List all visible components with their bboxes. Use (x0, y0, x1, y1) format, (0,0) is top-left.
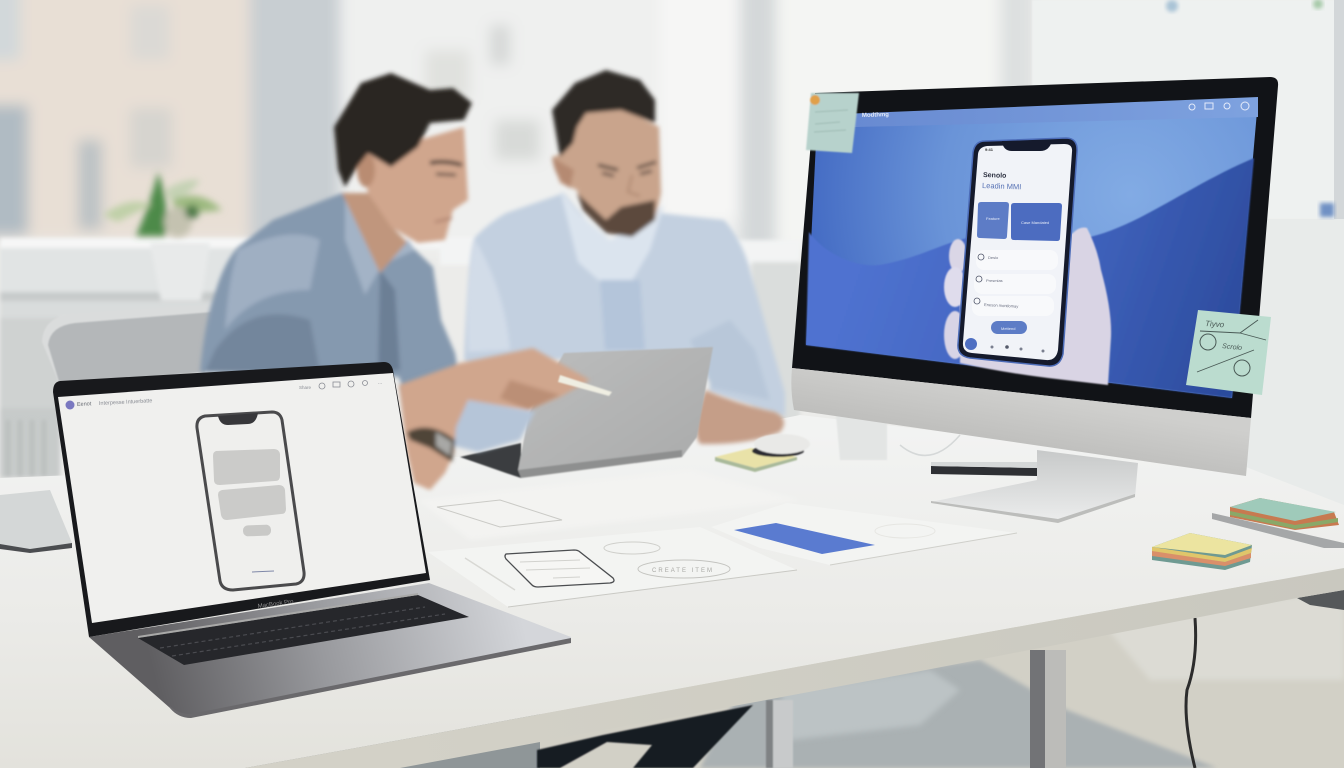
background laptop (460, 347, 713, 478)
foreground laptop (53, 362, 571, 718)
desk (0, 415, 1344, 768)
blue card on paper (734, 523, 875, 554)
floor, rug and cable (0, 580, 1344, 768)
sticky note: top of monitor (806, 93, 859, 153)
foreground laptop: Share (299, 385, 312, 390)
sticky note stacks on desk (1152, 498, 1344, 570)
monitor (791, 77, 1278, 476)
laptop keyboard (138, 593, 469, 665)
wireframe phone on laptop (197, 412, 304, 590)
phone heading: Senolo (983, 172, 1007, 180)
sticky note: right of monitor: Tiyvo (1205, 319, 1225, 329)
phone on monitor: Case Mandated (1021, 220, 1049, 225)
foreground laptop: Interpesse Intuerbatte (99, 398, 153, 407)
monitor chin (791, 368, 1251, 476)
left edge tablet (0, 490, 72, 553)
monitor screen (806, 100, 1258, 398)
hand holding phone (944, 228, 1111, 385)
paper wireframe sketches on desk: CREATE ITEM (652, 568, 712, 574)
monitor stand (836, 415, 1138, 523)
phone round button (965, 338, 977, 350)
phone on monitor: Leadin MMI (982, 181, 1021, 191)
laptop brand label: MacBook Pro (257, 599, 295, 610)
phone on monitor: Mettend (1001, 326, 1015, 331)
paper wireframe sketches on desk (418, 470, 1017, 607)
title bar icons (1189, 102, 1249, 110)
phone on monitor: Deslo (988, 255, 999, 260)
screen wave (806, 158, 1254, 398)
sticky note: right of monitor: Scrolo (1222, 343, 1242, 352)
foreground laptop: Eenot (77, 401, 92, 408)
mouse and notes behind (715, 434, 810, 472)
monitor: Modthmg (862, 112, 889, 119)
foreground laptop: ... (378, 380, 382, 386)
sticky note: right of monitor (1186, 310, 1271, 395)
laptop screen (58, 373, 426, 623)
laptop base (89, 583, 571, 717)
hand of man on the right (696, 390, 784, 444)
desk leg (1030, 650, 1066, 768)
laptop lid (53, 362, 430, 637)
phone on monitor: 9:41 (985, 147, 994, 152)
person: man on the right (464, 70, 785, 416)
screen title bar (817, 97, 1258, 128)
phone on monitor: Presmias (986, 278, 1003, 283)
phone pill button (991, 321, 1027, 334)
legs of person under the desk (537, 705, 753, 768)
sketch: phone on paper (505, 550, 614, 587)
potted plant (103, 172, 222, 301)
person: man on the left, torso and head (200, 73, 472, 440)
rear desk leg (766, 700, 793, 768)
phone on monitor: Feature (986, 216, 1001, 221)
phone on monitor (958, 138, 1077, 366)
chair back (42, 305, 212, 385)
phone on monitor: Eneson montlomay (984, 302, 1018, 309)
phone blue cards (977, 202, 1009, 239)
arm and hand of man on the left (399, 348, 590, 490)
desk front edge (245, 568, 1344, 768)
pen in hand (558, 375, 612, 396)
phone list rows (976, 250, 1058, 270)
laptop toolbar icons (319, 380, 368, 389)
